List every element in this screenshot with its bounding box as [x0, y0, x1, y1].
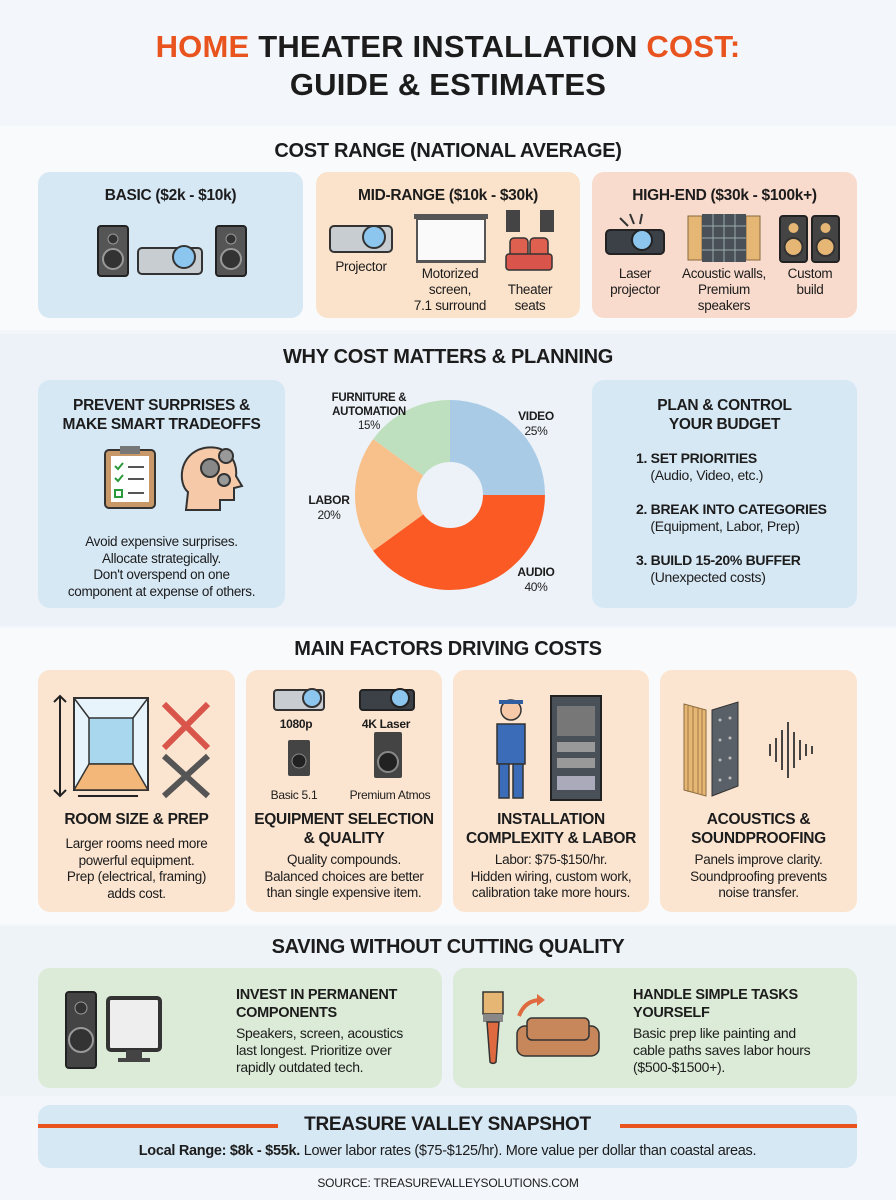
panel: handle simple tasks: ($500-$1500+).: [633, 1059, 725, 1075]
chart: donut: 40%: [524, 580, 548, 594]
panel: high-end: speakers: [698, 298, 750, 313]
panel: equipment: 1080p: [280, 717, 312, 731]
panel: installation: Labor: $75-$150/hr.: [495, 852, 607, 867]
heading: why cost matters: WHY COST MATTERS & PLANNING: [283, 346, 613, 368]
panel: invest in permanent: rapidly outdated tech.: [236, 1059, 363, 1075]
icon: projector: [329, 225, 393, 253]
panel: prevent surprises: Avoid expensive surprises.: [85, 534, 238, 549]
panel: acoustics: Soundproofing prevents: [690, 868, 827, 884]
icon: acoustic wall: [688, 214, 760, 262]
panel: prevent surprises: component at expense of others.: [68, 584, 255, 598]
icon: equipment tiers: [273, 688, 415, 778]
chart: donut: FURNITURE &: [332, 392, 406, 404]
title: GUIDE & ESTIMATES: [290, 67, 606, 102]
icon: custom speakers: [779, 215, 840, 263]
panel: mid-range: seats: [515, 298, 545, 313]
icon: speakers and projector: [97, 225, 247, 277]
panel: acoustics: noise transfer.: [718, 885, 799, 900]
source: SOURCE: TREASUREVALLEYSOLUTIONS.COM: [317, 1176, 579, 1190]
panel: installation: COMPLEXITY & LABOR: [466, 830, 636, 847]
panel: high-end: HIGH-END ($30k - $100k+): [632, 187, 817, 204]
panel: plan & control budget: YOUR BUDGET: [669, 416, 780, 433]
icon: room: [53, 694, 210, 798]
icon: laser projector: [605, 214, 665, 255]
panel: equipment: Quality compounds.: [287, 852, 401, 867]
icon: clipboard: [104, 446, 156, 509]
panel: high-end: Custom: [788, 266, 832, 281]
panel: high-end: Acoustic walls,: [682, 266, 766, 281]
panel: handle simple tasks: Basic prep like painting and: [633, 1025, 796, 1041]
panel: mid-range: screen,: [429, 282, 471, 297]
panel: treasure valley snapshot: TREASURE VALLEY SNAPSHOT: [304, 1114, 591, 1135]
icon: speaker and monitor: [65, 991, 162, 1069]
title: HOME THEATER INSTALLATION COST:: [156, 29, 740, 64]
panel: high-end: Premium: [698, 282, 750, 297]
panel: high-end: build: [796, 282, 824, 297]
panel: equipment: Basic 5.1: [271, 788, 317, 802]
panel: invest in permanent: last longest. Prioritize over: [236, 1042, 391, 1058]
panel: equipment: & QUALITY: [304, 830, 384, 847]
heading: main factors: MAIN FACTORS DRIVING COSTS: [294, 638, 602, 660]
panel: prevent surprises: Allocate strategically.: [102, 550, 221, 566]
panel: room size: adds cost.: [107, 886, 166, 900]
panel: mid-range: 7.1 surround: [414, 298, 486, 313]
panel: basic: BASIC ($2k - $10k): [105, 187, 236, 204]
panel: installation: calibration take more hours.: [472, 885, 630, 900]
panel: high-end: [592, 172, 857, 318]
panel: equipment: 4K Laser: [362, 717, 410, 731]
panel: installation: Hidden wiring, custom work,: [471, 868, 631, 884]
panel: mid-range: Projector: [335, 259, 387, 274]
panel: acoustics: [660, 670, 857, 912]
panel: acoustics: Panels improve clarity.: [695, 852, 822, 867]
panel: invest in permanent: [38, 968, 442, 1088]
chart: donut: AUDIO: [517, 565, 555, 579]
panel: plan & control budget: [592, 380, 857, 608]
icon: screen: [414, 214, 488, 263]
icon: panels and sound wave: [684, 701, 813, 797]
panel: installation: INSTALLATION: [497, 811, 605, 828]
title: [156, 29, 740, 102]
panel: equipment: Balanced choices are better: [264, 868, 424, 884]
panel: prevent surprises: Don't overspend on one: [93, 567, 230, 582]
panel: equipment: than single expensive item.: [267, 885, 421, 900]
panel: high-end: projector: [610, 282, 660, 297]
icon: technician and rack: [496, 695, 602, 801]
panel: handle simple tasks: HANDLE SIMPLE TASKS: [633, 987, 798, 1003]
panel: treasure valley snapshot: Local Range: $8k - $55k. Lower labor rates ($75-$125/hr). More value per dollar than coastal areas.: [139, 1143, 756, 1159]
panel: room size: [38, 670, 235, 912]
panel: prevent surprises: MAKE SMART TRADEOFFS: [62, 416, 261, 433]
chart: donut: AUTOMATION: [332, 406, 406, 418]
panel: plan & control budget: (Equipment, Labor, Prep): [650, 518, 800, 534]
panel: plan & control budget: PLAN & CONTROL: [657, 397, 792, 414]
panel: plan & control budget: (Unexpected costs): [650, 569, 766, 585]
panel: room size: ROOM SIZE & PREP: [64, 811, 209, 828]
panel: room size: powerful equipment.: [79, 852, 194, 868]
panel: invest in permanent: Speakers, screen, acoustics: [236, 1025, 403, 1041]
icon: head with gears: [180, 446, 244, 511]
panel: handle simple tasks: [453, 968, 857, 1088]
chart: donut: 15%: [358, 420, 380, 432]
panel: prevent surprises: PREVENT SURPRISES &: [73, 397, 250, 414]
panel: acoustics: ACOUSTICS &: [707, 811, 810, 828]
panel: invest in permanent: COMPONENTS: [236, 1005, 337, 1021]
panel: mid-range: Theater: [508, 282, 552, 297]
panel: invest in permanent: INVEST IN PERMANENT: [236, 987, 397, 1003]
heading: cost range: COST RANGE (NATIONAL AVERAGE): [274, 140, 622, 162]
panel: plan & control budget: (Audio, Video, etc.): [650, 467, 763, 483]
panel: high-end: Laser: [619, 266, 651, 281]
panel: basic: [38, 172, 303, 318]
panel: room size: Larger rooms need more: [66, 836, 207, 851]
panel: plan & control budget: 1. SET PRIORITIES: [636, 450, 757, 466]
panel: mid-range: Motorized: [422, 266, 478, 281]
chart: donut: 20%: [317, 508, 341, 522]
panel: installation: [453, 670, 649, 912]
chart: donut: [308, 392, 555, 594]
panel: treasure valley snapshot: [38, 1105, 857, 1168]
panel: plan & control budget: 2. BREAK INTO CATEGORIES: [636, 501, 827, 517]
panel: mid-range: MID-RANGE ($10k - $30k): [358, 187, 538, 204]
panel: equipment: [246, 670, 442, 912]
panel: prevent surprises: [38, 380, 285, 608]
icon: theater seats: [505, 210, 554, 271]
panel: handle simple tasks: YOURSELF: [633, 1005, 710, 1021]
chart: donut: LABOR: [308, 493, 350, 507]
panel: equipment: Premium Atmos: [350, 788, 430, 802]
panel: plan & control budget: 3. BUILD 15-20% BUFFER: [636, 552, 801, 568]
heading: saving: SAVING WITHOUT CUTTING QUALITY: [272, 936, 624, 958]
icon: brush and couch: [482, 991, 600, 1064]
panel: handle simple tasks: cable paths saves labor hours: [633, 1042, 810, 1058]
chart: donut: 25%: [524, 424, 548, 438]
panel: mid-range: [316, 172, 580, 318]
panel: room size: Prep (electrical, framing): [67, 869, 206, 884]
chart: donut: VIDEO: [518, 409, 554, 423]
panel: acoustics: SOUNDPROOFING: [691, 830, 826, 847]
panel: equipment: EQUIPMENT SELECTION: [254, 811, 434, 828]
